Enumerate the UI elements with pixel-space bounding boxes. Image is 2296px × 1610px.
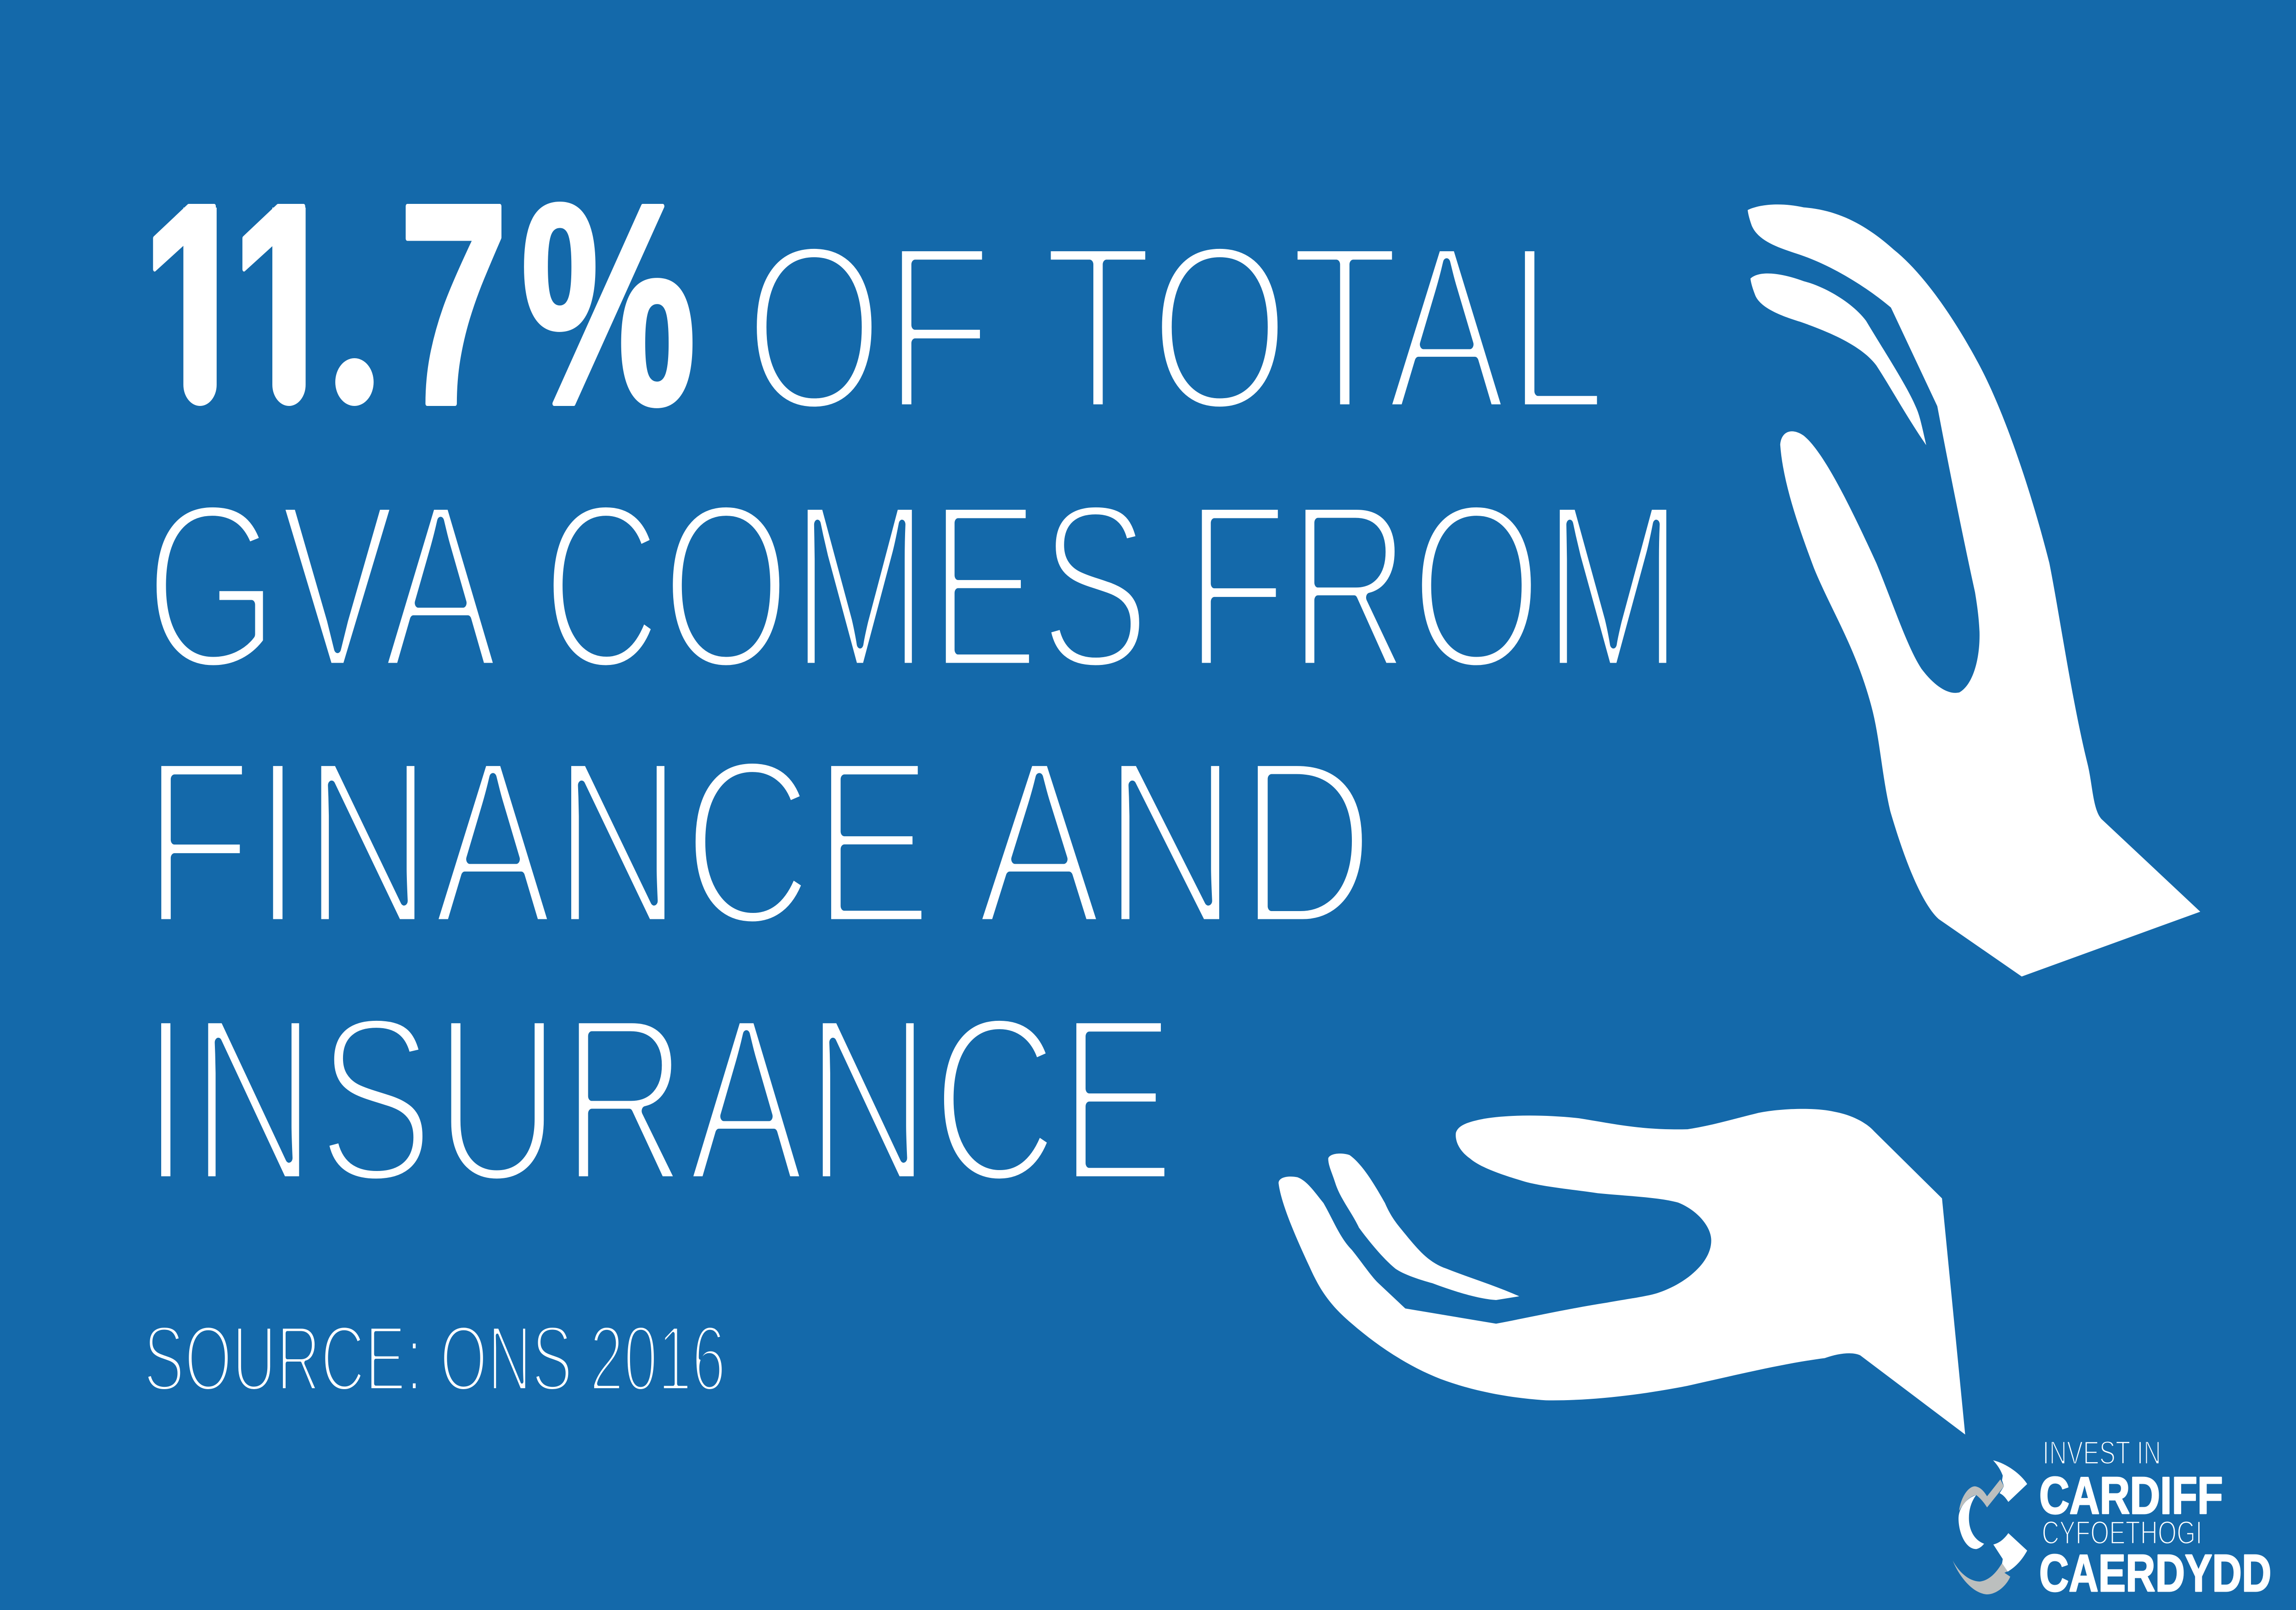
big number: 11.7% xyxy=(141,144,696,465)
logo text: cardiff: CARDIFF xyxy=(2039,1466,2223,1525)
headline line 2: GVA xyxy=(144,454,499,718)
logo mark xyxy=(1953,1460,2027,1594)
headline line 1: TOTAL xyxy=(1043,196,1607,460)
headline line 2: COMES xyxy=(542,454,1150,718)
headline line 4: INSURANCE xyxy=(141,968,1176,1232)
headline line 3 xyxy=(143,710,1375,974)
headline line 1: OF xyxy=(745,196,993,460)
headline line 2 xyxy=(144,454,1684,718)
source note: SOURCE: ONS 2016 xyxy=(144,1306,726,1410)
headline line 2: FROM xyxy=(1185,454,1684,718)
icon: upper hand xyxy=(1748,204,2200,977)
logo text: caerdydd: CAERDYDD xyxy=(2039,1544,2271,1602)
headline line 1 xyxy=(745,196,1607,460)
headline line 3: AND xyxy=(976,710,1375,974)
logo text: invest in: INVEST IN xyxy=(2043,1435,2161,1471)
icon: lower hand xyxy=(1278,1109,1965,1435)
headline statistic xyxy=(141,144,1684,1232)
logo text: cyfoethogi: CYFOETHOGI xyxy=(2042,1514,2202,1551)
headline line 3: FINANCE xyxy=(143,710,933,974)
logo: Invest in Cardiff xyxy=(1953,1435,2271,1602)
